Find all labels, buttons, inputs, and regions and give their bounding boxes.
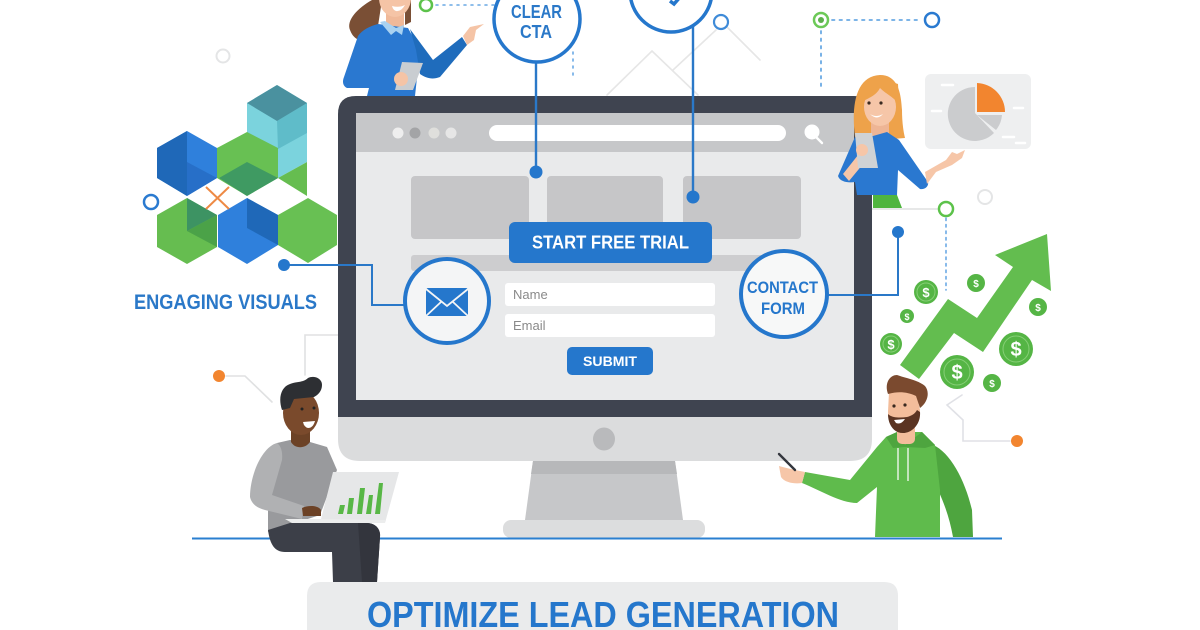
connector: visuals to email — [278, 259, 405, 305]
ground line — [192, 538, 1002, 540]
callout: contact form: CONTACT — [747, 278, 819, 297]
contact form fields: Email — [513, 318, 546, 333]
chart: growth arrow — [900, 234, 1051, 379]
connector: contact form — [826, 226, 904, 295]
heading: engaging visuals: ENGAGING VISUALS — [134, 291, 317, 314]
callout: clear cta: CTA — [520, 22, 552, 42]
person: man with laptop — [250, 377, 399, 582]
callout: check mark badge — [630, 0, 712, 204]
monitor stand — [503, 461, 705, 538]
button: submit: SUBMIT — [583, 353, 637, 369]
icons: dollar coins: $ — [922, 285, 930, 300]
person: woman with tablet presenting chart — [838, 75, 965, 208]
person: man in green hoodie — [779, 375, 973, 537]
person: woman in blue pointing — [343, 0, 484, 96]
callout: contact form: FORM — [761, 299, 805, 318]
icons: dollar coins: $ — [973, 279, 979, 290]
monitor body — [338, 96, 872, 461]
button: start free trial: START FREE TRIAL — [532, 232, 689, 252]
callout: clear cta — [494, 0, 580, 178]
button: start free trial — [509, 222, 712, 263]
icon: email circle — [405, 259, 489, 343]
callout: clear cta: CLEAR — [511, 2, 562, 22]
icons: dollar coins: $ — [951, 362, 963, 384]
icons: dollar coins: $ — [989, 379, 995, 390]
icon: engaging visuals hexagon cluster — [157, 85, 337, 264]
contact form fields: Name — [513, 287, 548, 302]
browser window screen — [356, 113, 854, 400]
icons: dollar coins — [880, 274, 1047, 392]
icons: dollar coins: $ — [904, 312, 910, 322]
icons: dollar coins: $ — [887, 337, 895, 352]
callout: contact form — [741, 251, 827, 337]
contact form fields — [505, 283, 715, 337]
icons: dollar coins: $ — [1035, 303, 1041, 314]
background connector decorations — [144, 0, 1023, 447]
button: submit — [567, 347, 653, 375]
icons: dollar coins: $ — [1010, 339, 1022, 361]
pie chart card — [925, 74, 1031, 149]
title panel — [307, 582, 898, 630]
